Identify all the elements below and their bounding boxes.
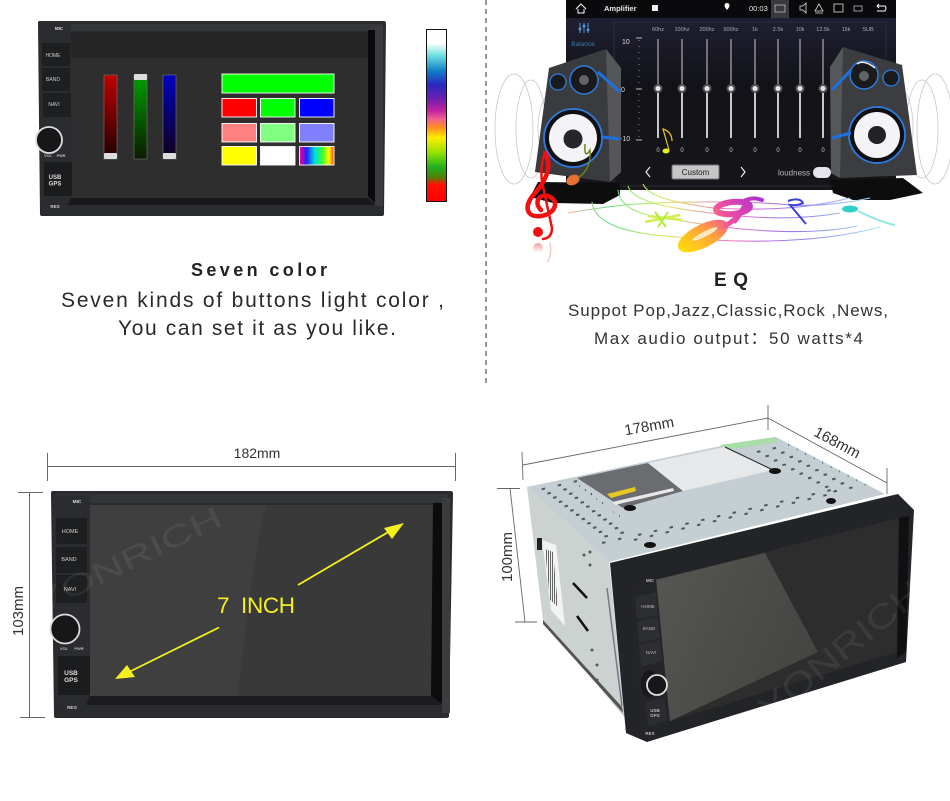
button column: USB <box>64 670 78 677</box>
bezel buttons: RES <box>645 731 655 736</box>
equalizer screen: 0 <box>680 148 684 154</box>
chassis top <box>527 437 885 562</box>
bezel buttons: MIC <box>646 578 655 583</box>
button column: HOME <box>62 529 79 535</box>
equalizer screen: 0 <box>753 148 757 154</box>
vent dots: front rows <box>634 488 840 540</box>
description: EQ: Max audio output：50 watts*4 <box>594 329 863 348</box>
label: 7 INCH: 7 INCH <box>217 593 295 618</box>
custom button <box>646 165 831 179</box>
red treble clef <box>528 153 555 262</box>
button column: GPS <box>64 677 79 684</box>
panel: seven color <box>36 21 446 340</box>
button column: MIC <box>73 499 82 505</box>
equalizer screen: 0 <box>705 148 709 154</box>
heading: Seven color: Seven color <box>191 260 327 280</box>
dimension: height 103mm <box>18 492 45 718</box>
device: front view <box>50 491 453 718</box>
frequency labels: 12.5k <box>816 27 830 33</box>
colour gradient strip <box>426 30 446 202</box>
device: isometric view <box>527 437 914 742</box>
scale <box>620 38 642 143</box>
label: 103mm: 103mm <box>10 586 27 636</box>
custom button: Custom <box>682 168 710 177</box>
panel: EQ <box>495 0 950 348</box>
button column: BAND <box>61 557 77 563</box>
bezel buttons: HOME <box>641 604 655 609</box>
button column: PWR <box>57 154 66 158</box>
equalizer screen: 0 <box>729 148 733 154</box>
panel: 3D dimensions <box>497 405 930 742</box>
heading: EQ: EQ <box>714 270 748 291</box>
label: 168mm: 168mm <box>811 424 863 462</box>
button column: GPS <box>49 182 61 188</box>
button column <box>50 495 90 711</box>
colour swatches <box>222 74 334 165</box>
frequency labels: 2.5k <box>773 27 783 33</box>
button column: HOME <box>46 53 61 59</box>
label: 178mm: 178mm <box>623 414 675 439</box>
equalizer screen: 0 <box>776 148 780 154</box>
dimension: depth 168mm <box>768 418 887 494</box>
description: EQ <box>568 301 888 348</box>
large gradient treble clef <box>675 198 762 257</box>
button column: BAND <box>46 77 60 83</box>
button column: NAVI <box>64 587 77 593</box>
equalizer screen: 0 <box>656 148 660 154</box>
frequency labels: 60hz <box>652 27 664 33</box>
arrow: upper right <box>298 523 404 585</box>
description: seven color: You can set it as you like. <box>118 317 396 340</box>
bezel buttons: GPS <box>650 713 660 718</box>
frequency labels <box>652 27 874 33</box>
vent dots: left cluster <box>542 478 630 543</box>
description: EQ: Suppot Pop,Jazz,Classic,Rock ,News, <box>568 301 888 320</box>
equalizer screen: 0 <box>798 148 802 154</box>
colour sliders <box>104 74 176 159</box>
chassis side <box>527 487 625 718</box>
bezel buttons: NAVI <box>646 650 656 655</box>
button column: MIC <box>55 26 64 31</box>
status bar: 00:03 <box>749 4 768 13</box>
balance: Balance <box>571 41 595 48</box>
dimension: width 182mm <box>48 453 456 481</box>
arrow: lower left <box>115 628 219 679</box>
description: seven color <box>61 289 444 340</box>
button column: RES <box>67 705 78 711</box>
front bezel <box>610 494 914 742</box>
button column: VOL <box>60 646 69 651</box>
equalizer screen: 0 <box>821 148 825 154</box>
button column: NAVI <box>48 102 60 108</box>
scale: 0 <box>621 87 625 94</box>
scale: 10 <box>622 39 630 46</box>
vent dots: right cluster <box>757 445 866 492</box>
label: 182mm: 182mm <box>234 445 280 461</box>
frequency labels: 500hz <box>724 27 739 33</box>
watermark: isometric view: YONRICH <box>751 573 930 728</box>
left speaker <box>530 49 621 204</box>
status bar: Amplifier <box>604 4 637 13</box>
labels <box>577 463 683 508</box>
bezel buttons <box>635 578 668 736</box>
frequency labels: 200hz <box>700 27 715 33</box>
bezel buttons: BAND <box>643 626 656 631</box>
dimension: width 178mm <box>522 405 768 480</box>
watermark: front view: YONRICH <box>29 501 227 620</box>
bezel buttons: USB <box>650 708 660 713</box>
button column: VOL <box>44 154 53 158</box>
button column: PWR <box>74 646 84 651</box>
panel: front dimensions <box>10 445 456 718</box>
music notes <box>565 129 895 227</box>
sound wave rings <box>495 74 950 184</box>
button column: USB <box>49 175 62 181</box>
label: 100mm: 100mm <box>499 532 516 582</box>
button column <box>36 24 72 209</box>
description: seven color: Seven kinds of buttons light color , <box>61 289 444 312</box>
scale: -10 <box>620 136 630 143</box>
custom button: loudness <box>778 168 810 178</box>
frequency labels: 15k <box>842 27 851 33</box>
balance <box>571 23 595 48</box>
frequency labels: SUB <box>862 27 874 33</box>
music staff lines <box>568 184 880 241</box>
frequency labels: 100hz <box>674 27 690 33</box>
device: head unit with colour settings screen <box>36 21 386 216</box>
sliders <box>658 39 823 88</box>
frequency labels: 10k <box>796 27 805 33</box>
button column: RES <box>50 204 60 209</box>
status bar <box>576 3 886 13</box>
dimension: height 100mm <box>497 488 537 622</box>
equalizer screen <box>566 0 896 190</box>
right speaker <box>830 47 923 200</box>
frequency labels: 1k <box>752 27 758 33</box>
